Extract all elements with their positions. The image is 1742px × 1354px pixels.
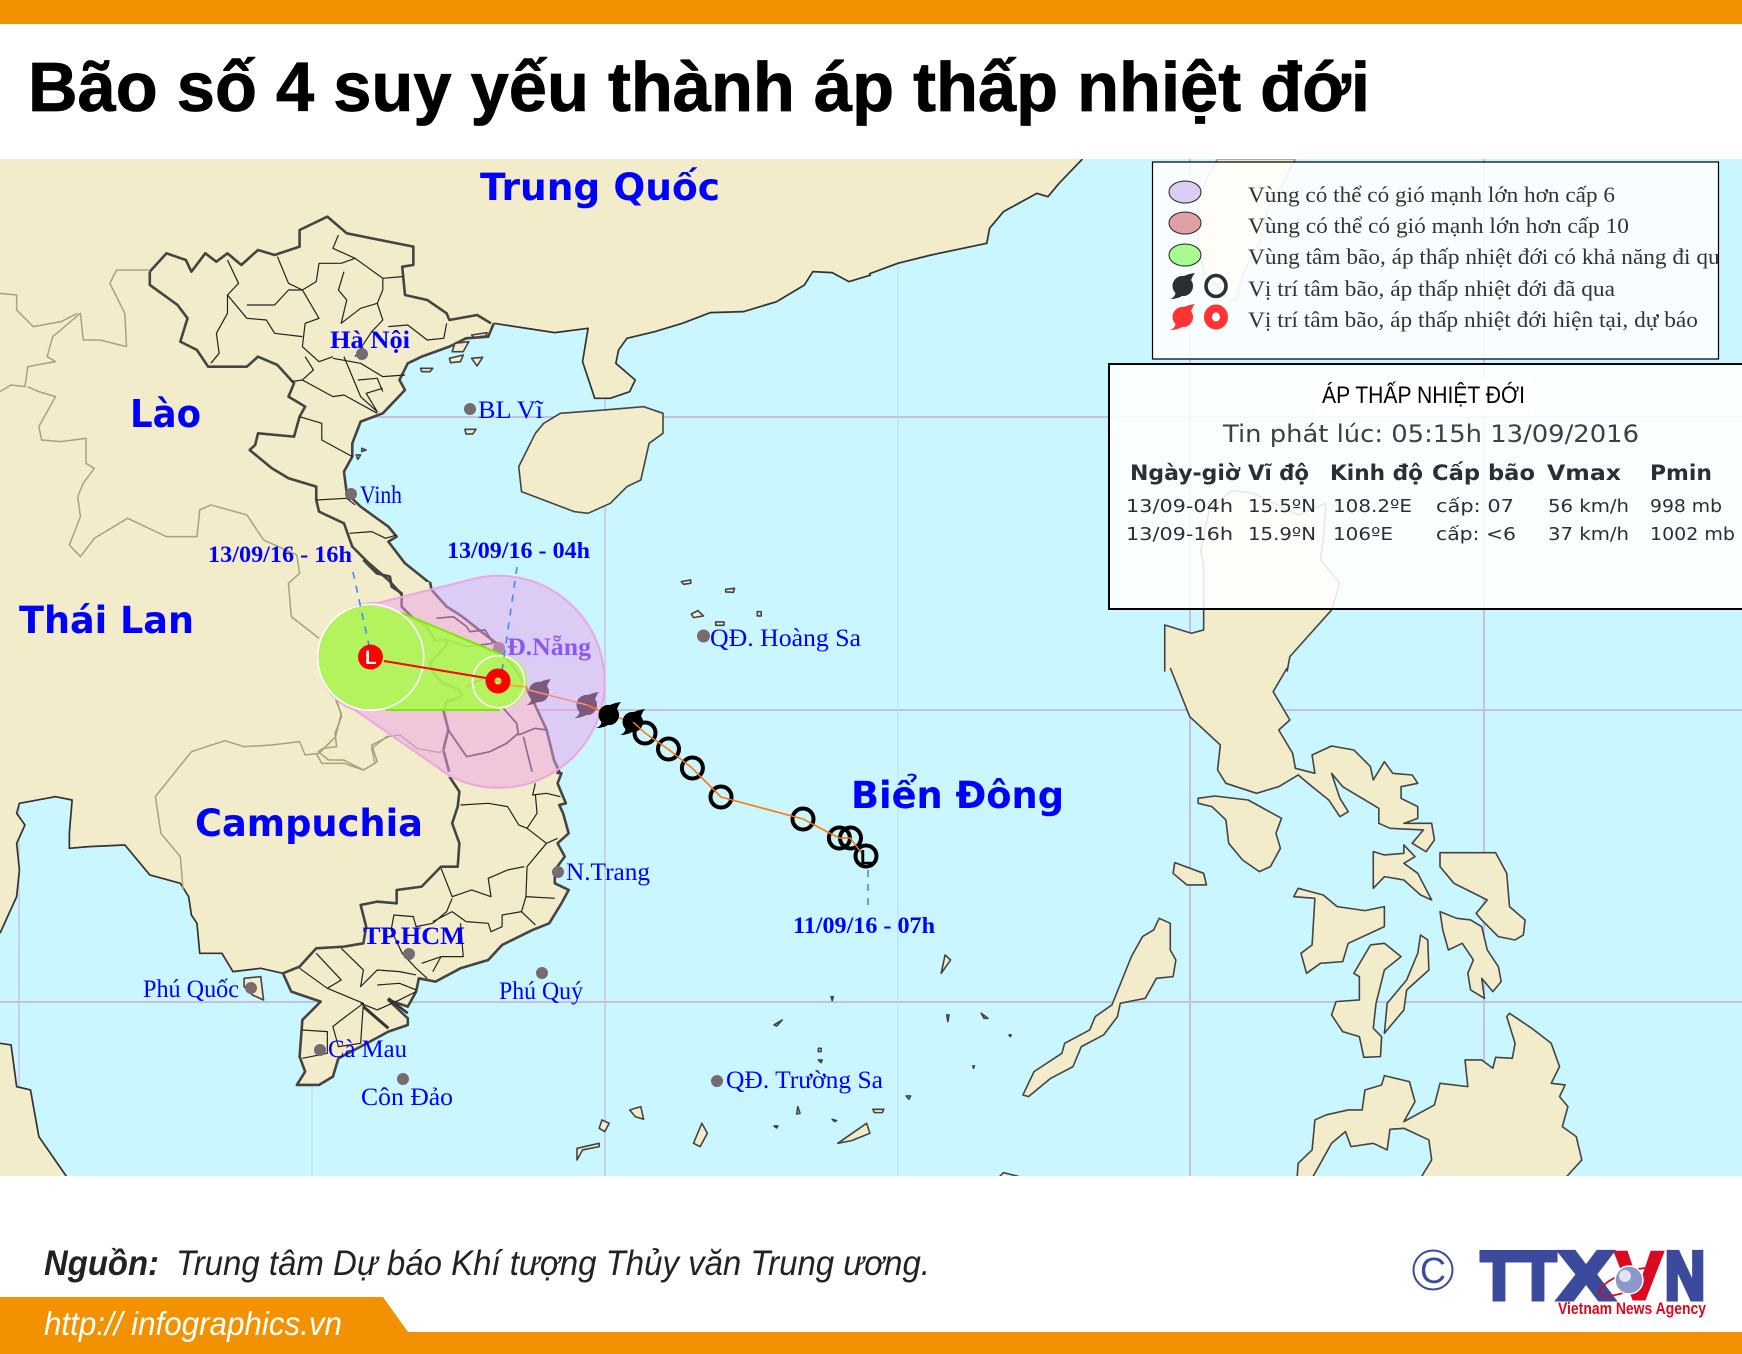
date labels xyxy=(208,538,935,938)
start position L: L xyxy=(860,847,872,869)
source note: Nguồn: xyxy=(44,1244,159,1283)
place labels: Phú Quốc xyxy=(143,976,239,1003)
country label: Trung Quốc: Trung Quốc xyxy=(480,166,720,209)
table row 16h: 106ºE xyxy=(1333,524,1393,545)
legend swatch: storm centre zone xyxy=(1169,244,1201,266)
bottom orange banner xyxy=(0,1297,1742,1354)
table row 16h: 1002 mb xyxy=(1650,524,1735,545)
storm centre forecast corridor xyxy=(318,604,527,710)
city dot: Đà Nẵng xyxy=(494,642,504,654)
table row 04h xyxy=(1126,496,1722,517)
info heading: ÁP THẤP NHIỆT ĐỚI xyxy=(1322,381,1525,409)
table row 16h xyxy=(1126,524,1735,545)
date labels: 13/09/16 - 04h xyxy=(447,538,590,563)
agency name: Vietnam News Agency xyxy=(1558,1300,1707,1318)
landmass: north Vietnam and China xyxy=(0,159,871,625)
landmass: China coast east xyxy=(869,159,1340,672)
date labels: 11/09/16 - 07h xyxy=(793,913,935,938)
TTXVN logo: V xyxy=(1615,1238,1663,1314)
place labels: Côn Đảo xyxy=(361,1084,453,1111)
info table panel xyxy=(1109,364,1742,609)
place labels: N.Trang xyxy=(566,859,650,886)
past track: storm symbols inside wind zone xyxy=(498,679,599,718)
legend swatch: wind above level 10 xyxy=(1169,212,1201,234)
borders: north Vietnam xyxy=(0,217,491,638)
TTXVN logo: T xyxy=(1520,1238,1556,1314)
legend text xyxy=(1248,182,1730,332)
table row 04h: 13/09-04h xyxy=(1126,496,1233,517)
legend icons: current and forecast positions xyxy=(1170,304,1224,330)
title: Bão số 4 suy yếu thành áp thấp nhiệt đới xyxy=(28,48,1370,126)
place labels: Cà Mau xyxy=(328,1036,407,1063)
legend icons: past positions xyxy=(1170,273,1226,299)
black past storm symbols xyxy=(596,702,645,735)
storm track line xyxy=(384,661,864,856)
table row 16h: 15.9ºN xyxy=(1248,524,1316,545)
Philippines islands xyxy=(873,668,1582,1178)
country label: Campuchia: Campuchia xyxy=(195,802,423,845)
table header: Ngày-giờ xyxy=(1130,461,1241,485)
city labels under the overlay xyxy=(494,634,592,661)
table row 16h: 13/09-16h xyxy=(1126,524,1233,545)
country label: Lào: Lào xyxy=(130,392,201,436)
TTXVN logo: N xyxy=(1665,1238,1705,1314)
legend swatch: wind above level 6 xyxy=(1169,181,1201,203)
landmass: central Vietnam xyxy=(0,560,561,772)
current position 04h xyxy=(490,673,506,689)
strong wind area xyxy=(319,576,605,788)
top orange bar xyxy=(0,0,1742,24)
table header: Pmin xyxy=(1650,461,1712,485)
table row 04h: 15.5ºN xyxy=(1248,496,1316,517)
forecast position 16h xyxy=(358,644,383,670)
table header: Vĩ độ xyxy=(1248,461,1309,485)
place markers xyxy=(246,348,722,1086)
legend text: Vùng tâm bão, áp thấp nhiệt đới có khả năng đi qua xyxy=(1248,244,1730,269)
website url: http:// infographics.vn xyxy=(44,1305,342,1342)
copyright mark: C xyxy=(1420,1250,1446,1291)
label: Đ.Nẵng: Đ.Nẵng xyxy=(507,634,592,661)
table row 04h: 998 mb xyxy=(1650,496,1722,517)
table row 16h: 37 km/h xyxy=(1548,524,1629,545)
place labels: Phú Quý xyxy=(499,978,583,1005)
orange line over past rings xyxy=(633,722,864,856)
legend text: Vùng có thể có gió mạnh lớn hơn cấp 10 xyxy=(1248,213,1629,238)
table row 04h: 56 km/h xyxy=(1548,496,1629,517)
landmass: south Vietnam, Cambodia, gulf xyxy=(0,700,870,1177)
date labels: 13/09/16 - 16h xyxy=(208,542,352,567)
table header: Kinh độ xyxy=(1330,461,1423,485)
issue time: Tin phát lúc: 05:15h 13/09/2016 xyxy=(1222,420,1639,448)
place labels: TP.HCM xyxy=(363,923,465,950)
place labels: Vinh xyxy=(360,482,402,509)
country label: Thái Lan: Thái Lan xyxy=(19,599,194,642)
info heading xyxy=(1315,378,1534,415)
legend text: Vùng có thể có gió mạnh lớn hơn cấp 6 xyxy=(1248,182,1615,207)
place labels: Hà Nội xyxy=(330,327,410,354)
table row 16h: cấp: <6 xyxy=(1436,524,1516,545)
past track positions xyxy=(634,722,876,866)
globe icon xyxy=(1596,1262,1658,1302)
table row 04h: 108.2ºE xyxy=(1333,496,1412,517)
forecast position 16h: L xyxy=(365,648,377,669)
TTXVN logo xyxy=(1481,1238,1707,1318)
map panel xyxy=(0,159,1742,1178)
legend panel xyxy=(1152,162,1730,359)
TTXVN logo: T xyxy=(1481,1238,1517,1314)
source note: Trung tâm Dự báo Khí tượng Thủy văn Trung ương. xyxy=(176,1244,930,1283)
table header: Vmax xyxy=(1547,461,1622,485)
copyright mark xyxy=(1414,1250,1452,1291)
place labels: BL Vĩ xyxy=(478,397,544,424)
table header: Cấp bão xyxy=(1432,461,1535,485)
table header xyxy=(1130,461,1712,485)
TTXVN logo: X xyxy=(1559,1238,1613,1314)
place labels xyxy=(143,327,883,1111)
forecast leader lines xyxy=(353,567,868,912)
place labels: QĐ. Trường Sa xyxy=(726,1067,883,1094)
sea label: Biển Đông: Biển Đông xyxy=(851,774,1064,817)
place labels: QĐ. Hoàng Sa xyxy=(710,625,861,652)
legend text: Vị trí tâm bão, áp thấp nhiệt đới hiện tại, dự báo xyxy=(1248,307,1698,332)
legend text: Vị trí tâm bão, áp thấp nhiệt đới đã qua xyxy=(1248,276,1615,301)
table row 04h: cấp: 07 xyxy=(1436,496,1514,517)
